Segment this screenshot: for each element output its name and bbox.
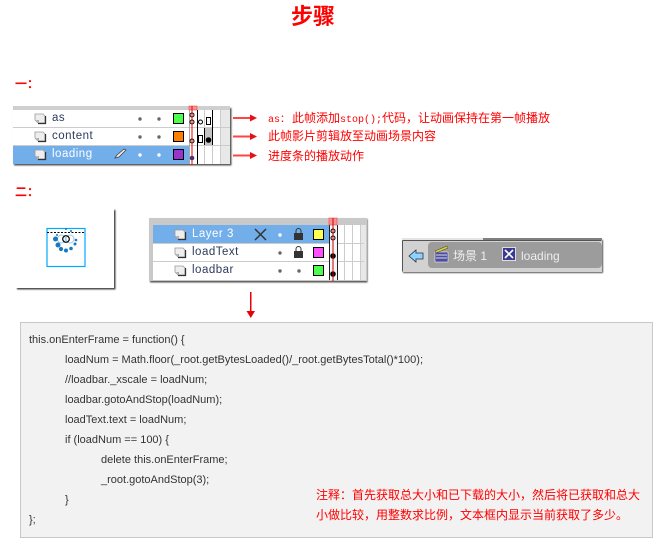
panel: breadcrumb bar — [402, 238, 603, 273]
code listing: loadText.text = loadNum; — [65, 414, 186, 426]
panel: timeline one — [13, 106, 232, 166]
code listing: this.onEnterFrame = function() { — [29, 334, 185, 346]
frames — [331, 229, 335, 276]
title: 步骤 — [291, 4, 335, 29]
layer row: loading — [35, 148, 184, 160]
code listing: loadbar.gotoAndStop(loadNum); — [65, 394, 222, 406]
layer row: content — [35, 130, 184, 142]
annotation note: 注释：首先获取总大小和已下载的大小，然后将已获取和总大 — [316, 487, 640, 502]
code listing: _root.gotoAndStop(3); — [100, 474, 209, 486]
layer row: loadText: loadText — [192, 246, 239, 258]
annotation note: 小做比较，用整数求比例，文本框内显示当前获取了多少。 — [316, 507, 628, 522]
panel: code box — [20, 322, 652, 538]
layer row: Layer 3: Layer 3 — [192, 228, 234, 240]
icon: back arrow — [409, 250, 423, 262]
code listing: loadNum = Math.floor(_root.getBytesLoaded()/_root.getBytesTotal()*100); — [65, 354, 423, 366]
code listing: delete this.onEnterFrame; — [101, 454, 228, 466]
panel: preview stage — [15, 206, 116, 290]
breadcrumb label: scene: 场景 1 — [453, 249, 487, 263]
arrows: callouts — [233, 114, 257, 159]
frames — [190, 110, 212, 164]
layer row: content: content — [52, 130, 94, 142]
code listing: }; — [29, 514, 36, 526]
layer row: as: as — [52, 112, 65, 124]
callout text: as: 此帧添加 — [292, 111, 340, 125]
callout text: content: 此帧影片剪辑放至动画场景内容 — [268, 128, 436, 143]
playhead — [189, 106, 197, 165]
code listing — [29, 334, 423, 526]
callout text: as: as： — [268, 115, 290, 126]
layer row: as — [35, 112, 184, 124]
callout text: as: 代码，让动画保持在第一帧播放 — [382, 110, 550, 125]
icon: clapperboard — [435, 246, 448, 262]
layer row: loadbar — [175, 264, 324, 276]
arrow: down to code — [246, 292, 255, 318]
code listing: //loadbar._xscale = loadNum; — [65, 374, 207, 386]
panel: timeline two — [149, 218, 368, 282]
code listing: if (loadNum == 100) { — [65, 434, 169, 446]
heading: step one: 一： — [15, 77, 39, 91]
heading: step two: 二： — [15, 185, 39, 199]
layer row: Layer 3 — [175, 228, 324, 240]
layer row: loading: loading — [52, 148, 93, 160]
layer row: loadText — [175, 246, 324, 258]
annotation note — [316, 487, 640, 522]
layer row: loadbar: loadbar — [192, 264, 234, 276]
breadcrumb label: loading: loading — [521, 249, 560, 263]
icon: movie clip — [502, 248, 516, 260]
callout text: as: stop(); — [340, 114, 382, 126]
callout text: loading: 进度条的播放动作 — [268, 148, 364, 163]
code listing: } — [65, 494, 69, 506]
playhead — [329, 218, 337, 281]
